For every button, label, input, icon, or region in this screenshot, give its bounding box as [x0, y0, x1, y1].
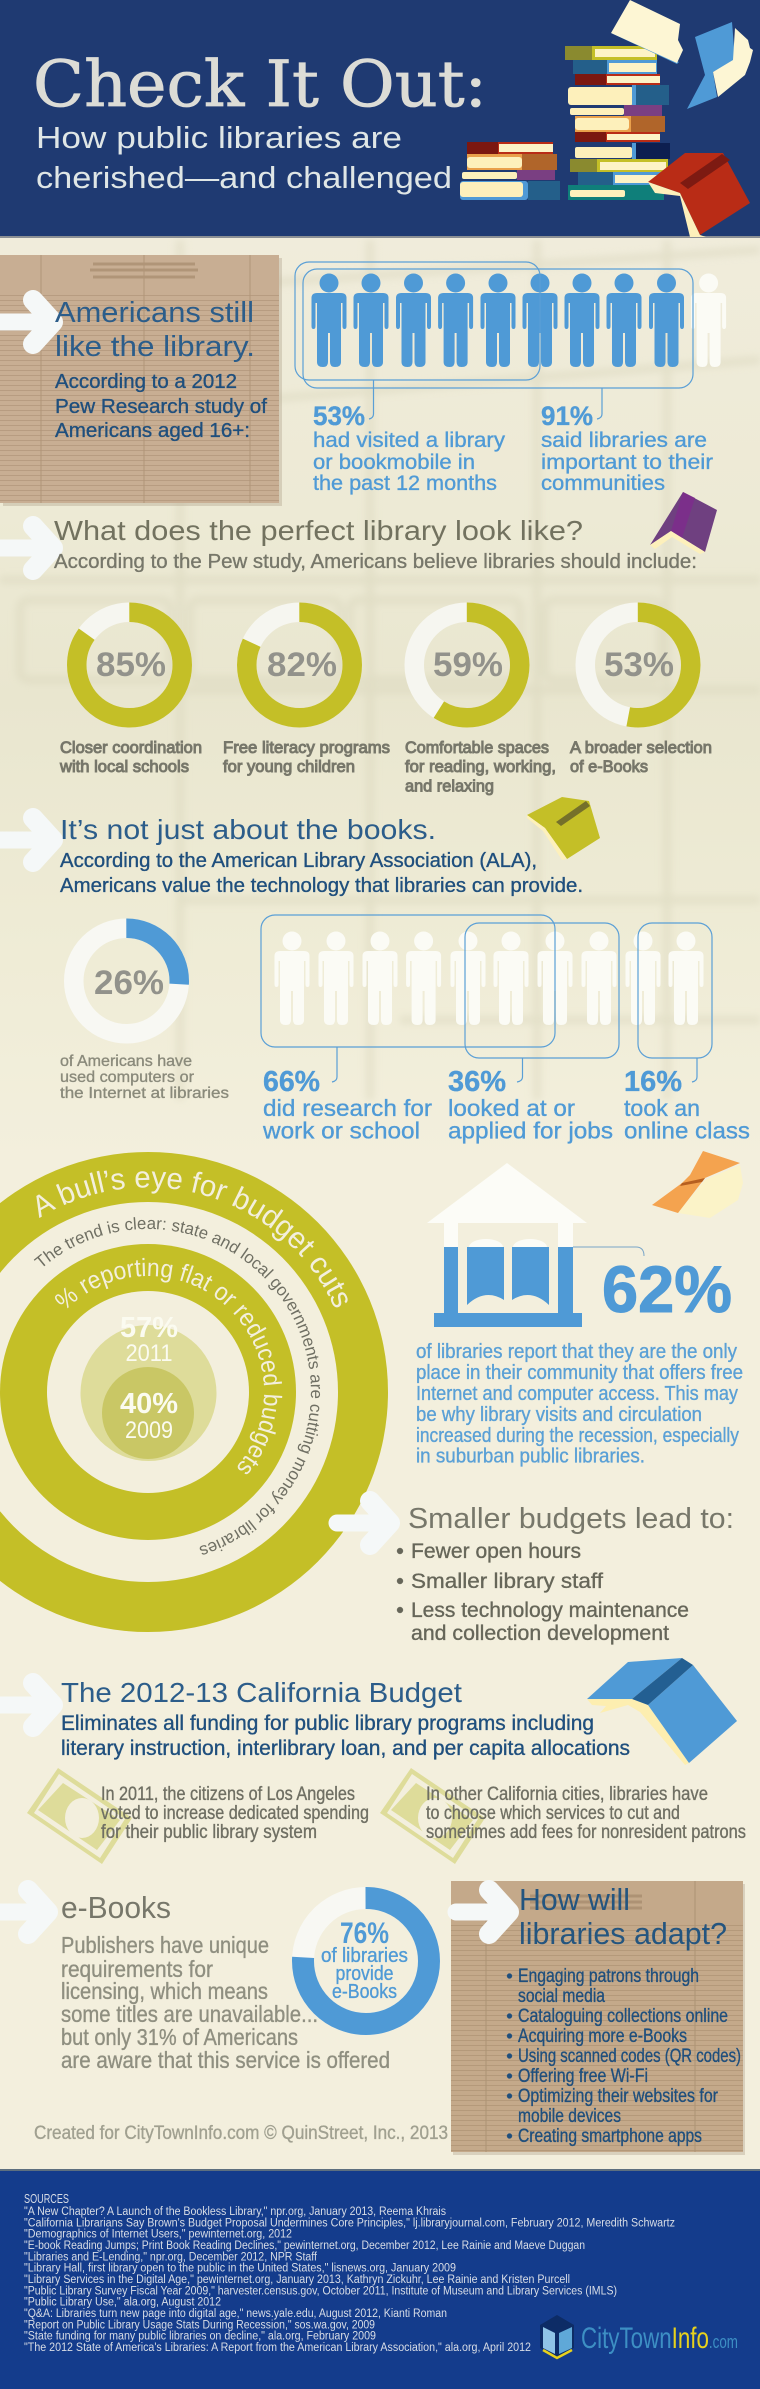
label: 26%: of Americans have: [60, 1053, 192, 1070]
icon: flying blue book: [687, 22, 753, 109]
stat: 66%: did research for: [263, 1095, 432, 1121]
bullet list: Optimizing their websites for: [518, 2086, 719, 2107]
stat: 36%: [448, 1066, 613, 1144]
icon: purple book: [650, 492, 717, 554]
ring text: The trend is clear: state and local governments are cutting money for libraries: [34, 1217, 320, 1555]
donut: 26%: [74, 928, 179, 1034]
donut: 76%: of libraries: [321, 1945, 408, 1967]
text block: place in their community that offers free: [416, 1362, 743, 1384]
brackets: [261, 915, 712, 1082]
text: other California cities: In other California cities, libraries have: [426, 1784, 708, 1805]
icon: blue book: [587, 1658, 737, 1765]
value: 57% 2011: [120, 1312, 178, 1367]
label: 53%: A broader selection: [570, 738, 712, 757]
panel: smaller budgets: [337, 1501, 734, 1645]
sources list: "State funding for many public libraries on decline," ala.org, February 2009: [24, 2331, 376, 2343]
subheading: [60, 850, 583, 897]
bullet list: Engaging patrons through: [518, 1966, 699, 1987]
stat: 16%: 16%: [624, 1066, 682, 1098]
bullet list: Smaller library staff: [411, 1569, 603, 1593]
bullet list: Creating smartphone apps: [518, 2126, 702, 2147]
subheading: [61, 1712, 630, 1760]
icon: short stack of books: [460, 142, 560, 200]
arrow: [0, 1890, 48, 1934]
panel: e-Books: [0, 1890, 429, 2073]
icon: flying cream book: [611, 0, 683, 64]
value: 40% 2009: 40%: [120, 1388, 178, 1420]
subheading: literary instruction, interlibrary loan, and per capita allocations: [61, 1737, 630, 1760]
text block: but only 31% of Americans: [61, 2024, 298, 2050]
label: 85%: with local schools: [59, 757, 189, 776]
sources list: "Public Library Use," ala.org, August 2012: [24, 2297, 221, 2309]
panel: Americans still like the library: [0, 255, 726, 506]
bullet list: Fewer open hours: [411, 1539, 581, 1563]
text block: in suburban public libraries.: [416, 1446, 645, 1468]
stat: 16%: [624, 1066, 750, 1144]
pictogram: white people: [274, 932, 704, 1025]
value: 57% 2011: 57%: [120, 1312, 178, 1344]
donut: 26%: 26%: [94, 964, 164, 1002]
heading: Americans still: [55, 297, 254, 329]
stat: 53%: 53%: [313, 401, 365, 431]
intro text: [55, 371, 267, 442]
stat: 36%: 36%: [448, 1066, 506, 1098]
heading: [519, 1882, 727, 1951]
stat: 91%: said libraries are: [541, 429, 707, 452]
paper note: [451, 1881, 745, 2155]
pictogram: ten people: [312, 274, 726, 367]
text block: [61, 1932, 390, 2073]
bullet list: Offering free Wi-Fi: [518, 2066, 648, 2087]
stat: 91%: [541, 401, 713, 495]
text block: of libraries report that they are the only: [416, 1341, 737, 1363]
stat: 91%: 91%: [541, 401, 593, 431]
donut: 53%: [585, 612, 691, 718]
chart: bull's eye for budget cuts: [0, 1152, 388, 1632]
bullet list: [507, 1966, 741, 2147]
donut: 59%: 59%: [433, 646, 503, 684]
donut: 76%: 76%: [340, 1917, 389, 1950]
stat: 53%: the past 12 months: [313, 472, 497, 495]
label: 53%: [570, 738, 712, 776]
sources list: "A New Chapter? A Launch of the Bookless Library," npr.org, January 2013, Reema Khrais: [24, 2206, 446, 2218]
label: 85%: [59, 738, 202, 776]
arrow: [0, 1683, 53, 1727]
panel: California budget: [0, 1658, 746, 1864]
logo: CityTownInfo: [540, 2315, 738, 2358]
sources list: "Report on Public Library Usage Stats During Recession," sos.wa.gov, 2009: [24, 2319, 375, 2331]
title: Check It Out:: [33, 48, 487, 122]
stat: 66%: 66%: [263, 1066, 320, 1098]
label: 82%: Free literacy programs: [223, 738, 390, 757]
sources list: "E-book Reading Jumps; Print Book Reading Declines," pewinternet.org, December 2012, Lee Rainie and Maeve Duggan: [24, 2240, 585, 2252]
intro text: Pew Research study of: [55, 396, 267, 418]
label: 53%: of e-Books: [570, 757, 648, 776]
stat: 62%: 62%: [602, 1252, 732, 1326]
donut: 76%: [303, 1898, 429, 2024]
bullet list: [397, 1539, 689, 1645]
stat: 66%: [262, 1066, 432, 1144]
heading: [55, 297, 255, 363]
bullet list: Less technology maintenance: [411, 1598, 689, 1622]
arrow: [0, 818, 53, 862]
label: 85%: Closer coordination: [60, 738, 202, 757]
subheading: According to the American Library Association (ALA),: [60, 850, 537, 872]
donut: 85%: 85%: [96, 646, 166, 684]
text block: licensing, which means: [61, 1978, 268, 2004]
heading: It’s not just about the books.: [60, 814, 436, 845]
label: 59%: for reading, working,: [405, 757, 556, 776]
text: Los Angeles: voted to increase dedicated spending: [101, 1803, 369, 1824]
subtitle: [36, 120, 452, 195]
text block: [416, 1341, 743, 1468]
sources list: "Libraries and E-Lending," npr.org, December 2012, NPR Staff: [24, 2251, 318, 2263]
heading: The 2012-13 California Budget: [61, 1677, 462, 1708]
sources list: [24, 2192, 675, 2354]
icon: orange book: [652, 1151, 743, 1218]
heading: What does the perfect library look like?: [54, 515, 583, 546]
text block: are aware that this service is offered: [61, 2047, 390, 2073]
value: 40% 2009: 2009: [125, 1417, 173, 1444]
credit line: Created for CityTownInfo.com © QuinStreet, Inc., 2013: [34, 2123, 448, 2144]
donut: 76%: provide: [336, 1963, 394, 1985]
donut: 53%: 53%: [604, 646, 674, 684]
donut: 82%: [247, 612, 352, 718]
stat: 16%: online class: [624, 1118, 750, 1144]
heading: Smaller budgets lead to:: [408, 1503, 734, 1535]
icon: olive book: [527, 797, 600, 860]
text: Los Angeles: In 2011, the citizens of Los Angeles: [101, 1784, 355, 1805]
donut: 76%: e-Books: [332, 1981, 397, 2003]
stat: 53%: had visited a library: [313, 429, 506, 452]
bullet list: social media: [518, 1986, 605, 2007]
label: 26%: the Internet at libraries: [60, 1085, 229, 1102]
label: 82%: for young children: [223, 757, 355, 776]
subtitle: cherished—and challenged: [36, 160, 452, 195]
paper note: [0, 255, 282, 506]
logo: CityTownInfo: CityTownInfo.com: [581, 2322, 738, 2355]
arrow: [0, 526, 53, 570]
stat: 66%: work or school: [262, 1118, 420, 1144]
heading: like the library.: [55, 331, 255, 363]
brackets: [295, 262, 693, 419]
text: other California cities: [426, 1784, 746, 1843]
bullet list: mobile devices: [518, 2106, 621, 2127]
label: 26%: [60, 1053, 229, 1102]
label: 59%: [405, 738, 556, 796]
arrow: [0, 300, 53, 344]
icon: library building: [427, 1163, 644, 1327]
sources list: SOURCES: [24, 2192, 69, 2206]
label: 59%: and relaxing: [405, 776, 494, 796]
footer: sources: [0, 2169, 760, 2389]
text: Los Angeles: [101, 1784, 369, 1843]
heading: libraries adapt?: [519, 1916, 727, 1951]
text block: some titles are unavailable...: [61, 2001, 318, 2027]
subheading: Americans value the technology that libraries can provide.: [60, 875, 583, 897]
sources list: "Q&A: Libraries turn new page into digital age," news.yale.edu, August 2012, Kianti Roman: [24, 2308, 447, 2320]
sources list: "Library Hall, first library open to the public in the United States," lisnews.org, January 2009: [24, 2263, 456, 2275]
sources list: "Demographics of Internet Users," pewinternet.org, 2012: [24, 2229, 292, 2241]
text block: requirements for: [61, 1956, 213, 1982]
intro text: Americans aged 16+:: [55, 420, 250, 442]
sources list: "The 2012 State of America's Libraries: A Report from the American Library Association," ala.org, April 2012: [24, 2342, 531, 2354]
stat: 36%: applied for jobs: [448, 1118, 613, 1144]
heading: How will: [519, 1882, 630, 1917]
label: 59%: Comfortable spaces: [405, 738, 549, 757]
header banner: [0, 0, 760, 238]
text block: be why library visits and circulation: [416, 1404, 702, 1426]
arrow: [337, 1501, 390, 1545]
ring heading: A bull’s eye for budget cuts: [36, 1170, 348, 1308]
icon: dollar bill left: [27, 1768, 132, 1864]
icon: red book: [648, 153, 750, 237]
stat: 91%: important to their: [541, 451, 713, 474]
stat: 16%: took an: [624, 1095, 700, 1121]
sources list: "Public Library Survey Fiscal Year 2009," harvester.census.gov, October 2011, Institute of Museum and Library Services (IMLS): [24, 2285, 617, 2297]
ring label: % reporting flat or reduced budgets: [55, 1258, 282, 1474]
donut: 82%: 82%: [267, 646, 337, 684]
stat: 91%: communities: [541, 472, 665, 495]
subtitle: How public libraries are: [36, 120, 402, 155]
subheading: Eliminates all funding for public library programs including: [61, 1712, 594, 1735]
bullet list: Acquiring more e-Books: [518, 2026, 687, 2047]
panel: not just about the books: [0, 797, 750, 1144]
sources list: "Library Services in the Digital Age," pewinternet.org, January 2013, Kathryn Zickuhr, Lee Rainie and Kristen Purcell: [24, 2274, 570, 2286]
arrow: [456, 1890, 509, 1934]
panel: 62% of libraries: [416, 1151, 743, 1468]
text block: Publishers have unique: [61, 1932, 269, 1958]
stat: 53%: or bookmobile in: [313, 451, 475, 474]
icon: tall stack of books: [565, 46, 670, 200]
donut: 59%: [414, 612, 520, 718]
panel: the perfect library: [0, 492, 717, 796]
panel: how will libraries adapt: [451, 1881, 745, 2155]
heading: e-Books: [61, 1890, 171, 1925]
text: Los Angeles: for their public library system: [101, 1822, 317, 1843]
subheading: According to the Pew study, Americans believe libraries should include:: [54, 551, 697, 573]
bullet list: and collection development: [411, 1621, 669, 1645]
stat: 53%: [313, 401, 506, 495]
value: 40% 2009: [120, 1388, 178, 1444]
label: 82%: [223, 738, 390, 776]
stat: 36%: looked at or: [448, 1095, 575, 1121]
value: 57% 2011: 2011: [126, 1340, 172, 1367]
donut: 85%: [77, 612, 182, 718]
text: other California cities: to choose which services to cut and: [426, 1803, 680, 1824]
label: 26%: used computers or: [60, 1069, 195, 1086]
intro text: According to a 2012: [55, 371, 237, 393]
icon: dollar bill right: [380, 1768, 485, 1864]
sources list: "California Librarians Say Brown's Budget Proposal Undermines Core Principles," lj.libraryjournal.com, February 2012, Meredith Schwartz: [24, 2217, 675, 2229]
